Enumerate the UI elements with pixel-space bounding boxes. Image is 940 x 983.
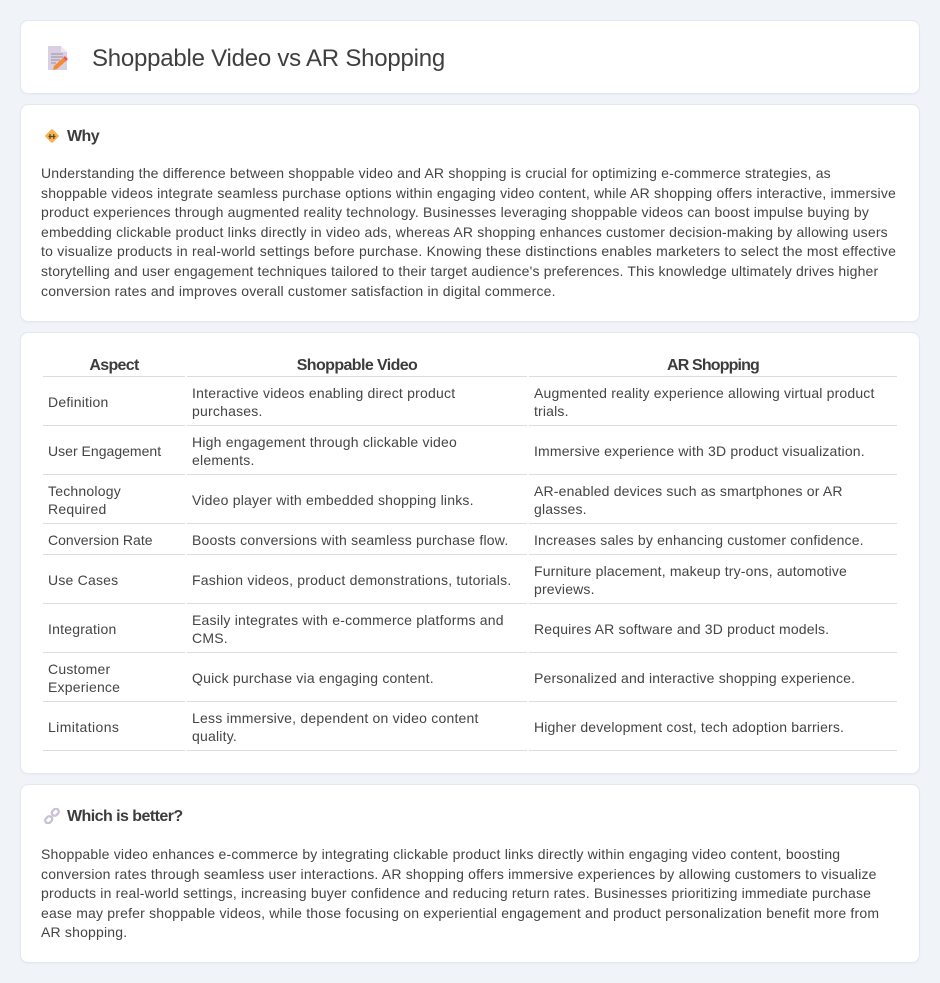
comparison table: elements. xyxy=(192,452,255,468)
icon: warning diamond xyxy=(45,129,59,143)
icon: memo with pencil xyxy=(48,46,68,70)
heading: which is better: Which is better? xyxy=(67,808,183,825)
comparison table xyxy=(43,357,897,751)
comparison table: Customer xyxy=(48,661,110,677)
panel: title card xyxy=(20,20,920,94)
text block: why: shoppable videos integrate seamless purchase options within engaging video content, while AR shopping offers interactive, immersive xyxy=(41,185,896,201)
comparison table: Less immersive, dependent on video content xyxy=(192,710,479,726)
text block: which is better: products in real-world settings, increasing buyer confidence and reducing return rates. Businesses prioritizing immediate purchase xyxy=(41,885,871,901)
comparison table: Boosts conversions with seamless purchase flow. xyxy=(192,532,508,548)
text block: why: embedding clickable product links directly in video ads, whereas AR shopping enhances customer decision-making by allowing users xyxy=(41,224,888,240)
text block: which is better: ease may prefer shoppable videos, while those focusing on experiential engagement and product personalization benefit more from xyxy=(41,905,879,921)
comparison table: Experience xyxy=(48,679,120,695)
comparison table: Integration xyxy=(48,621,116,637)
comparison table: Definition xyxy=(48,394,108,410)
comparison table: quality. xyxy=(192,728,237,744)
comparison table: purchases. xyxy=(192,403,263,419)
comparison table: Limitations xyxy=(48,719,119,735)
title: Shoppable Video vs AR Shopping xyxy=(92,45,445,72)
comparison table: Augmented reality experience allowing virtual product xyxy=(534,385,875,401)
comparison table: Easily integrates with e-commerce platforms and xyxy=(192,612,504,628)
comparison table: Use Cases xyxy=(48,572,118,588)
comparison table: Required xyxy=(48,501,106,517)
comparison table: Increases sales by enhancing customer confidence. xyxy=(534,532,864,548)
text block: which is better xyxy=(41,846,879,940)
comparison table: User Engagement xyxy=(48,443,161,459)
comparison table: trials. xyxy=(534,403,569,419)
comparison table: Conversion Rate xyxy=(48,532,153,548)
heading: why: Why xyxy=(67,128,99,145)
comparison table: Personalized and interactive shopping experience. xyxy=(534,670,855,686)
comparison table: CMS. xyxy=(192,630,228,646)
comparison table: previews. xyxy=(534,581,595,597)
text block: why: Understanding the difference between shoppable video and AR shopping is crucial for optimizing e-commerce strategies, as xyxy=(41,165,831,181)
comparison table: Furniture placement, makeup try-ons, automotive xyxy=(534,563,847,579)
comparison table: Aspect xyxy=(89,357,139,374)
comparison table: Technology xyxy=(48,483,121,499)
text block: which is better: Shoppable video enhances e-commerce by integrating clickable product links directly within engaging video content, boosting xyxy=(41,846,840,862)
panel: which is better xyxy=(20,784,920,963)
text block: why: conversion rates and improves overall customer satisfaction in digital commerce. xyxy=(41,283,556,299)
comparison table: Quick purchase via engaging content. xyxy=(192,670,434,686)
comparison table: AR-enabled devices such as smartphones or AR xyxy=(534,483,843,499)
comparison table: Interactive videos enabling direct product xyxy=(192,385,455,401)
text block: why: product experiences through augmented reality technology. Businesses leveraging shoppable videos can boost impulse buying by xyxy=(41,204,869,220)
text block: which is better: conversion rates through seamless user interactions. AR shopping offers immersive experiences by allowing customers to visualize xyxy=(41,866,877,882)
panel: why xyxy=(20,104,920,322)
comparison table: glasses. xyxy=(534,501,587,517)
icon: link xyxy=(44,808,60,824)
text block: which is better: AR shopping. xyxy=(41,924,127,940)
text block: why: to visualize products in real-world settings before purchase. Knowing these distinctions enables marketers to select the most effective xyxy=(41,243,896,259)
panel: comparison table card xyxy=(20,332,920,774)
comparison table: Video player with embedded shopping links. xyxy=(192,492,474,508)
text block: why: storytelling and user engagement techniques tailored to their target audience's preferences. This knowledge ultimately drives higher xyxy=(41,263,878,279)
comparison table: Fashion videos, product demonstrations, tutorials. xyxy=(192,572,511,588)
comparison table: Immersive experience with 3D product visualization. xyxy=(534,443,865,459)
comparison table: Shoppable Video xyxy=(297,357,417,374)
comparison table: High engagement through clickable video xyxy=(192,434,457,450)
comparison table: AR Shopping xyxy=(667,357,759,374)
comparison table: Requires AR software and 3D product models. xyxy=(534,621,829,637)
text block: why xyxy=(41,165,896,299)
comparison table: Higher development cost, tech adoption barriers. xyxy=(534,719,844,735)
